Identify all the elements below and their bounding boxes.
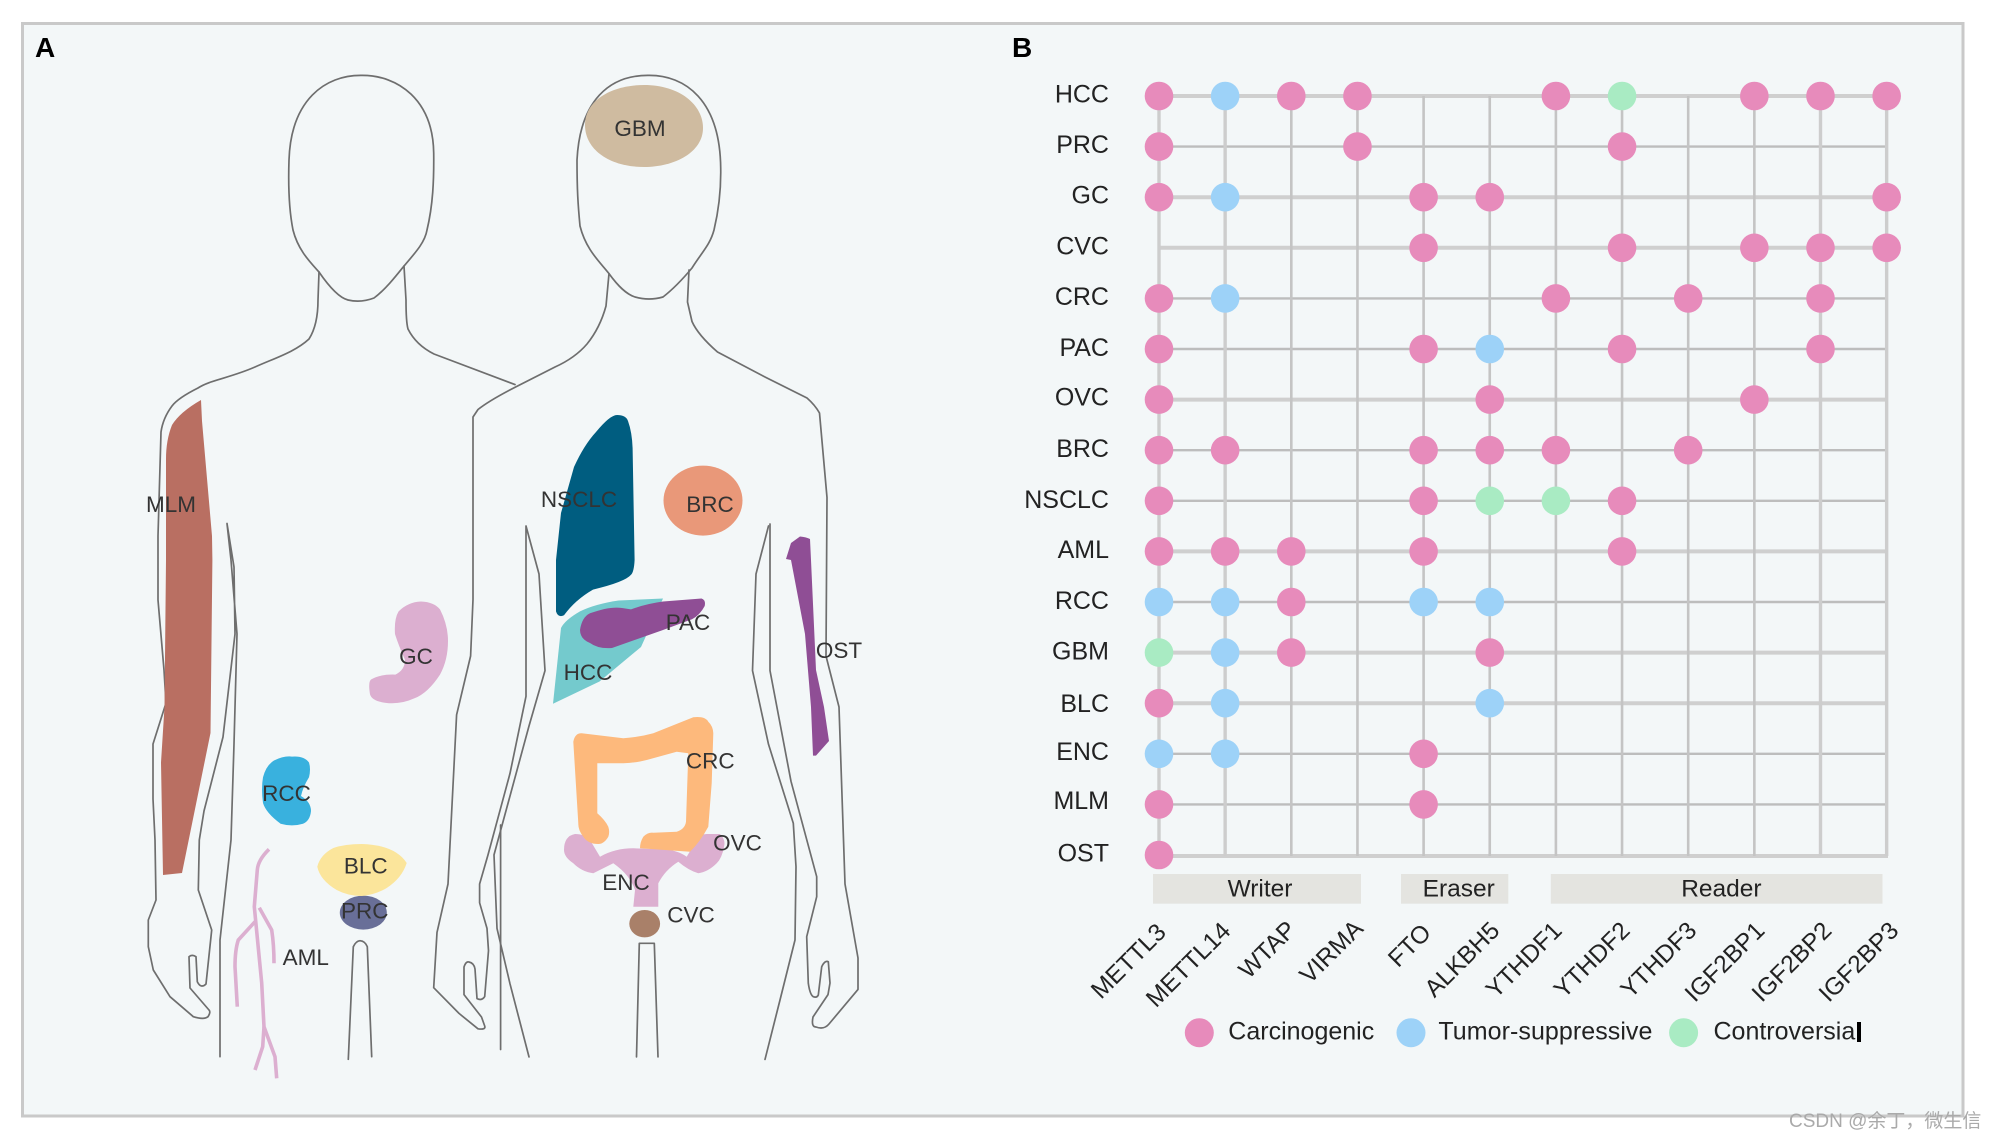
row: BRC bbox=[1056, 435, 1702, 465]
organ labels: OST bbox=[816, 638, 862, 663]
organ labels: PAC bbox=[666, 610, 710, 635]
organ labels: AML bbox=[283, 945, 329, 970]
row: PAC bbox=[1059, 334, 1835, 363]
row: BLC bbox=[1060, 689, 1504, 718]
row: ENC: ENC bbox=[1056, 738, 1109, 766]
heading: panel A: A bbox=[35, 32, 55, 63]
organ labels: OVC bbox=[713, 831, 762, 856]
column labels: YTHDF3 bbox=[1616, 917, 1702, 1004]
organ: PAC pancreas bbox=[580, 598, 705, 648]
row: OVC: OVC bbox=[1055, 384, 1109, 412]
row: AML: AML bbox=[1058, 536, 1109, 564]
row: CRC: CRC bbox=[1055, 283, 1109, 311]
organ labels: MLM bbox=[146, 492, 196, 517]
outline: left body bbox=[148, 75, 515, 1059]
column labels: ALKBH5 bbox=[1420, 917, 1505, 1003]
category band: Reader: Reader bbox=[1681, 876, 1762, 903]
organ: ENC OVC uterus and ovaries bbox=[564, 834, 724, 907]
category band: Writer: Writer bbox=[1228, 876, 1292, 903]
organ labels: BLC bbox=[344, 853, 388, 878]
organ: PRC prostate bbox=[340, 896, 387, 930]
column labels: IGF2BP3 bbox=[1814, 917, 1904, 1007]
heading: panel B: B bbox=[1012, 32, 1032, 63]
organ: OST bone bbox=[786, 536, 829, 756]
column labels: VIRMA bbox=[1295, 915, 1369, 989]
organ: RCC kidney bbox=[262, 756, 311, 825]
column labels bbox=[1086, 915, 1904, 1013]
column labels: FTO bbox=[1383, 919, 1437, 973]
organ: NSCLC lung bbox=[556, 415, 635, 616]
organ labels: BRC bbox=[686, 492, 734, 517]
row: RCC: RCC bbox=[1055, 587, 1109, 615]
organ labels bbox=[146, 116, 862, 970]
row: GC: GC bbox=[1072, 182, 1109, 210]
organ labels: ENC bbox=[602, 870, 650, 895]
column labels: METTL3 bbox=[1086, 919, 1172, 1004]
organ labels: RCC bbox=[262, 781, 311, 806]
organ labels: PRC bbox=[341, 898, 388, 923]
category band: Eraser: Eraser bbox=[1423, 876, 1495, 903]
row: PAC: PAC bbox=[1059, 334, 1109, 362]
row: MLM: MLM bbox=[1053, 787, 1109, 815]
row: OST bbox=[1058, 840, 1173, 869]
row: BRC: BRC bbox=[1056, 435, 1109, 463]
row: AML bbox=[1058, 536, 1636, 566]
column labels: YTHDF1 bbox=[1481, 917, 1568, 1004]
row: ENC bbox=[1056, 738, 1438, 768]
column labels: WTAP bbox=[1234, 916, 1302, 984]
organ: AML blood vessels bbox=[235, 849, 277, 1078]
row: GBM: GBM bbox=[1052, 638, 1109, 666]
category band: Reader bbox=[1551, 874, 1882, 904]
organ: CRC colon bbox=[573, 717, 713, 852]
row: HCC bbox=[1055, 81, 1901, 110]
organ: GBM brain bbox=[585, 85, 703, 167]
column labels: METTL14 bbox=[1141, 918, 1236, 1013]
row: CRC bbox=[1055, 283, 1835, 313]
organ labels: NSCLC bbox=[541, 487, 617, 512]
row: PRC bbox=[1056, 131, 1636, 161]
legend bbox=[1185, 1017, 1861, 1047]
legend: Tumor-suppressive bbox=[1438, 1017, 1652, 1045]
organ: HCC liver bbox=[553, 598, 663, 704]
row: GC bbox=[1072, 182, 1901, 212]
column labels: IGF2BP1 bbox=[1680, 917, 1770, 1007]
legend: Controversia bbox=[1714, 1017, 1855, 1045]
row: GBM bbox=[1052, 638, 1504, 667]
row: CVC: CVC bbox=[1056, 232, 1109, 260]
organ labels: CRC bbox=[686, 748, 735, 773]
organ: MLM muscle bbox=[161, 400, 212, 875]
watermark: CSDN @余丁，微生信 bbox=[1789, 1110, 1981, 1132]
row: MLM bbox=[1053, 787, 1438, 819]
category band: Eraser bbox=[1401, 874, 1508, 904]
organ: GC stomach bbox=[369, 602, 448, 703]
organ: CVC cervix bbox=[629, 910, 660, 937]
outline: right body bbox=[434, 75, 858, 1059]
organ: BRC breast bbox=[664, 466, 742, 536]
organ labels: HCC bbox=[564, 660, 612, 685]
legend: Carcinogenic bbox=[1228, 1017, 1374, 1045]
row: PRC: PRC bbox=[1056, 131, 1109, 159]
row: NSCLC: NSCLC bbox=[1024, 486, 1109, 514]
organ labels: GBM bbox=[614, 116, 666, 141]
organ: BLC bladder bbox=[317, 844, 407, 896]
panel B: dot matrix bbox=[1024, 81, 1901, 869]
row: CVC bbox=[1056, 232, 1901, 262]
organ labels: CVC bbox=[667, 903, 715, 928]
column labels: IGF2BP2 bbox=[1747, 917, 1837, 1007]
organ labels: GC bbox=[399, 644, 433, 669]
category band: Writer bbox=[1153, 874, 1361, 904]
row: BLC: BLC bbox=[1060, 690, 1109, 718]
row: HCC: HCC bbox=[1055, 81, 1109, 109]
row: OST: OST bbox=[1058, 840, 1109, 868]
column labels: YTHDF2 bbox=[1549, 917, 1636, 1004]
grid lines bbox=[1159, 96, 1888, 856]
row: NSCLC bbox=[1024, 486, 1636, 515]
row: OVC bbox=[1055, 384, 1769, 414]
panel A: body map bbox=[146, 75, 862, 1078]
row: RCC bbox=[1055, 587, 1504, 616]
